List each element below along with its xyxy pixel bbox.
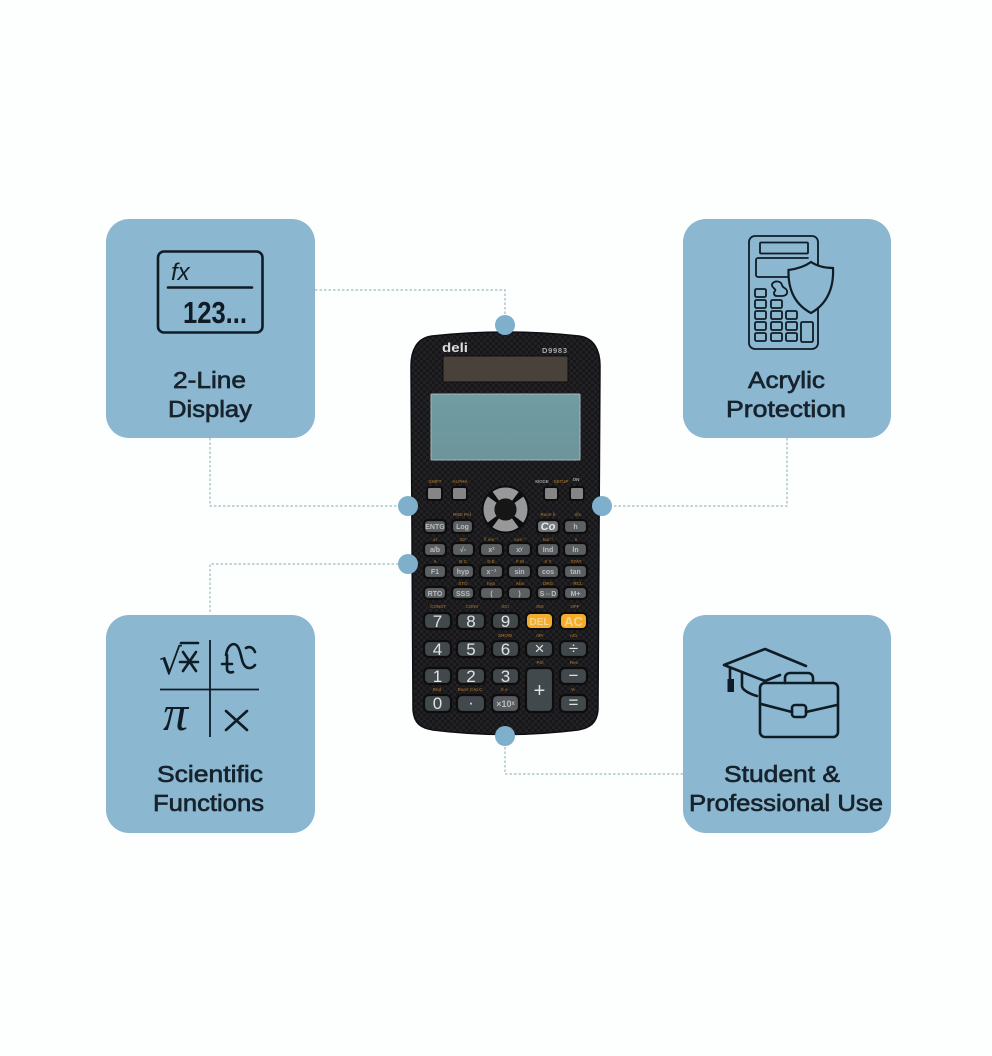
connector: student and professional use to calculator bottom	[505, 745, 683, 774]
panel: scientific functions	[106, 615, 315, 833]
number and operator keys: 8	[466, 612, 476, 631]
function key labels: Ran# b	[540, 512, 556, 517]
function key labels: RCL	[573, 581, 583, 586]
top function keys	[427, 487, 584, 500]
calculator	[411, 332, 600, 734]
panel: 2-line display	[106, 219, 315, 438]
scientific keys: h	[573, 524, 578, 531]
function key labels: SHOW	[498, 633, 513, 638]
heading: Acrylic Protection: Protection	[726, 396, 846, 422]
scientific keys: (	[490, 591, 493, 598]
scientific keys: √▫	[460, 546, 466, 554]
function key labels: Abs	[516, 581, 525, 586]
icon: two-line display	[158, 252, 262, 332]
function key labels: Pol	[536, 660, 544, 665]
function key labels: %	[571, 687, 575, 692]
number and operator keys: ×	[535, 639, 544, 658]
function key labels: nCr	[570, 633, 578, 638]
calculator body	[411, 332, 600, 734]
scientific keys: S⇔D	[540, 591, 556, 598]
number and operator keys: AC	[564, 614, 583, 629]
scientific keys: M+	[571, 591, 580, 598]
function key labels: ∛ sin⁻¹	[484, 536, 499, 542]
number and operator keys: 1	[433, 667, 442, 686]
function key labels: STAT	[570, 559, 582, 564]
panel: acrylic protection	[683, 219, 891, 438]
number and operator keys: 7	[433, 612, 442, 631]
number and operator keys: DEL	[530, 617, 550, 628]
heading: Student & Professional Use	[689, 761, 883, 816]
function key labels: RND Pol	[453, 512, 471, 517]
icon: math symbols grid: π	[163, 685, 190, 741]
connector dot: left lower	[398, 554, 418, 574]
heading: 2-Line Display: Display	[168, 396, 253, 422]
brand logo: deli	[442, 340, 468, 355]
number and operator keys: =	[569, 693, 579, 712]
number and operator keys: ·	[468, 693, 474, 712]
function key labels: ALPHA	[452, 479, 468, 484]
heading: Acrylic Protection	[726, 367, 846, 422]
function key labels: CONV	[465, 604, 479, 609]
scientific keys: cos	[542, 569, 554, 576]
number and operator keys: 5	[466, 640, 476, 659]
number and operator keys: 3	[501, 667, 510, 686]
function key labels: F M	[516, 559, 524, 564]
function key labels: SETUP	[553, 479, 569, 484]
function key labels: π e	[500, 687, 508, 692]
function key labels: MODE	[535, 479, 549, 484]
function key labels: Rec	[570, 660, 579, 665]
scientific keys: xʸ	[516, 547, 523, 554]
function key labels: d/c	[575, 512, 582, 517]
icon: math symbols grid: √	[159, 642, 182, 683]
function key labels: nPr	[536, 633, 544, 638]
connector dot: top	[495, 315, 515, 335]
panel: student and professional use	[683, 615, 891, 833]
icon: two-line display: fx	[171, 259, 191, 286]
scientific keys: hyp	[457, 569, 469, 576]
function key labels: ON	[573, 477, 579, 482]
function key labels	[428, 477, 583, 692]
scientific keys: F1	[431, 569, 439, 576]
connector dot: left upper	[398, 496, 418, 516]
function key labels: Ran# CALC	[458, 687, 483, 692]
connector: scientific functions to calculator left	[210, 564, 399, 612]
heading: Student & Professional Use: Professional Use	[689, 790, 883, 816]
scientific keys: sin	[514, 569, 525, 576]
scientific keys: x²	[488, 547, 495, 554]
scientific keys: Ind	[543, 547, 553, 554]
scientific keys: a/b	[430, 547, 440, 554]
function key labels: CONST	[430, 604, 446, 609]
scientific keys: x⁻¹	[487, 569, 497, 576]
directional pad	[482, 486, 530, 534]
function key labels: e	[575, 537, 578, 542]
heading: Acrylic Protection: Acrylic	[748, 367, 825, 393]
scientific keys	[424, 520, 587, 599]
scientific keys: Log	[456, 524, 469, 531]
number and operator keys: 9	[501, 612, 510, 631]
heading: Scientific Functions: Scientific	[157, 761, 263, 787]
number and operator keys: ×10ˣ	[496, 699, 515, 709]
scientific keys: tan	[570, 569, 581, 576]
model number: D9983	[542, 346, 567, 355]
connector dot: right	[592, 496, 612, 516]
function key labels: Rnd	[433, 687, 442, 692]
heading: Scientific Functions: Functions	[153, 790, 264, 816]
function key labels: OFF	[570, 604, 580, 609]
heading: Scientific Functions	[153, 761, 264, 816]
number and operator keys: 0	[433, 694, 442, 713]
function key labels: D E	[487, 559, 495, 564]
number and operator keys: 2	[466, 667, 476, 686]
heading: Student & Professional Use: Student &	[724, 761, 840, 787]
function key labels: 10ˣ	[460, 537, 467, 542]
number and operator keys: 4	[433, 640, 442, 659]
function key labels: SCI	[501, 604, 509, 609]
function key labels: x!	[433, 537, 437, 542]
icon: graduation cap and briefcase	[724, 649, 838, 737]
scientific keys: Co	[541, 521, 556, 533]
function key labels: SHIFT	[428, 479, 442, 484]
function key labels: tan⁻¹	[543, 537, 554, 542]
scientific keys: ENTG	[425, 524, 445, 531]
icon: two-line display: 123...	[183, 295, 247, 330]
LCD screen	[431, 394, 580, 460]
number and operator keys	[424, 612, 587, 713]
solar panel	[443, 356, 568, 382]
connector: 2-line display to calculator left	[210, 438, 399, 506]
icon: calculator with shield	[749, 236, 833, 349]
function key labels: A	[433, 559, 437, 564]
function key labels: cos⁻¹	[514, 537, 526, 542]
connector: 2-line display to calculator top	[315, 290, 505, 316]
number and operator keys: 6	[501, 640, 510, 659]
scientific keys: ln	[572, 547, 579, 554]
function key labels: hyp	[487, 581, 495, 586]
connector dot: bottom	[495, 726, 515, 746]
heading: 2-Line Display	[168, 367, 253, 422]
number and operator keys: +	[534, 680, 545, 702]
icon: math symbols grid	[159, 640, 259, 741]
function key labels: STO	[458, 581, 468, 586]
number and operator keys: ÷	[569, 639, 578, 658]
number and operator keys: −	[569, 666, 579, 685]
function key labels: B C	[459, 559, 468, 564]
function key labels: DRG	[543, 581, 553, 586]
scientific keys: SSS	[456, 591, 470, 598]
function key labels: INS	[536, 604, 544, 609]
scientific keys: )	[518, 591, 521, 598]
function key labels: X Y	[544, 559, 552, 564]
connector: acrylic protection to calculator right	[611, 438, 787, 506]
scientific keys: RTO	[428, 591, 443, 598]
heading: 2-Line Display: 2-Line	[173, 367, 246, 393]
